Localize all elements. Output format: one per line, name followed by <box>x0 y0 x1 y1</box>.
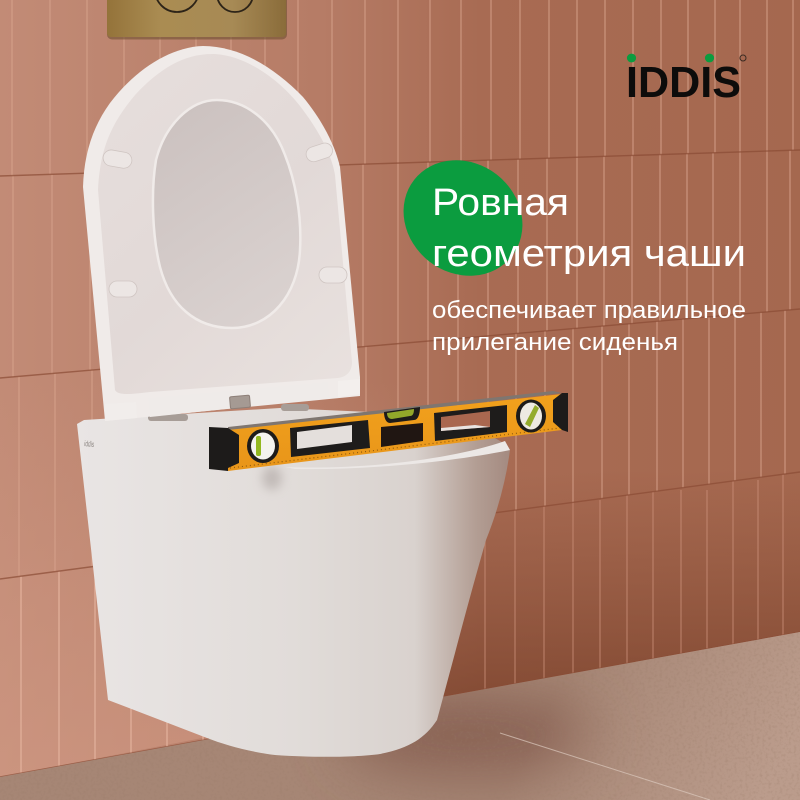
heading: геометрия чаши <box>432 233 746 275</box>
bowl logo: iddis <box>84 439 95 449</box>
left window <box>290 420 370 457</box>
toilet bowl <box>77 408 510 757</box>
bowl opening rim <box>285 441 510 469</box>
level left cap <box>209 427 239 471</box>
flush plate <box>107 0 287 40</box>
level ruler ticks <box>230 428 560 468</box>
heading: Ровная <box>432 182 569 224</box>
level orange body <box>228 394 562 471</box>
centre panel <box>381 423 423 447</box>
subheading: обеспечивает правильное <box>432 297 746 324</box>
hinge bar <box>148 382 330 417</box>
seat recess <box>153 100 300 328</box>
right vial <box>516 400 546 432</box>
bumpers <box>102 141 347 297</box>
level right cap <box>553 393 568 432</box>
subheading <box>432 297 746 356</box>
right window <box>434 405 507 441</box>
brand logo: IDDIS <box>626 58 741 107</box>
subheading: прилегание сиденья <box>432 329 678 356</box>
toilet seat lid <box>83 46 360 421</box>
hinge clip <box>230 395 250 409</box>
level shadow on bowl <box>262 466 282 490</box>
green accent circle <box>380 136 546 300</box>
top vial <box>384 407 420 423</box>
spirit level <box>209 391 568 471</box>
hinge fittings <box>148 404 309 421</box>
left vial <box>247 429 279 463</box>
floor <box>0 630 800 800</box>
heading <box>432 182 746 275</box>
level top strip <box>228 391 562 432</box>
